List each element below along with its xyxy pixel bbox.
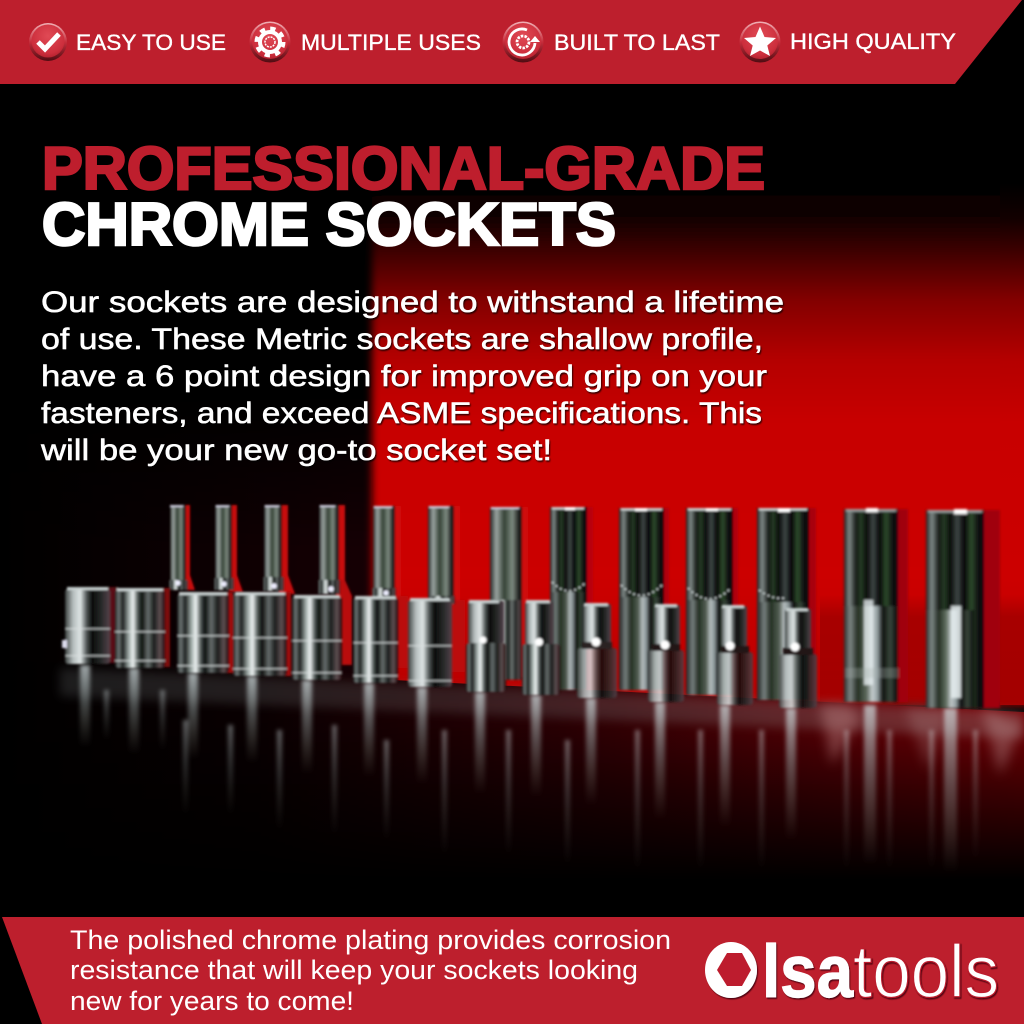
logo: Olsatools: tools <box>853 930 999 1013</box>
logo: Olsatools: lsa <box>762 930 854 1013</box>
socket e short <box>292 595 342 680</box>
socket 12 tall <box>844 508 908 702</box>
socket 3 tall <box>263 505 295 594</box>
icon: check mark badge <box>29 23 67 61</box>
footer text: new for years to come! <box>70 986 354 1016</box>
label: multiple uses: MULTIPLE USES <box>301 30 481 55</box>
socket f short <box>353 596 398 683</box>
socket d short <box>233 592 291 676</box>
body paragraph: of use. These Metric sockets are shallow profile, <box>41 323 763 356</box>
body paragraph: fasteners, and exceed ASME specifications. This <box>41 397 762 430</box>
top banner <box>0 0 1022 84</box>
socket h short <box>466 600 506 692</box>
socket g short <box>408 598 452 687</box>
body paragraph: have a 6 point design for improved grip on your <box>41 360 767 393</box>
socket m short <box>779 608 817 708</box>
reflective surface with socket reflections <box>58 663 1024 870</box>
socket 2 tall <box>214 505 243 592</box>
socket l short <box>717 605 753 705</box>
socket a short <box>62 587 118 664</box>
socket i short <box>522 600 560 695</box>
footer text: resistance that will keep your sockets looking <box>70 955 638 985</box>
footer text <box>70 925 671 1016</box>
footer text: The polished chrome plating provides corrosion <box>70 925 671 955</box>
icon: star badge <box>740 22 780 62</box>
label: built to last: BUILT TO LAST <box>554 30 720 55</box>
socket j short <box>577 603 617 698</box>
socket 10 tall <box>686 508 738 695</box>
title <box>42 135 765 258</box>
title: CHROME SOCKETS <box>42 191 616 258</box>
body paragraph <box>40 286 784 467</box>
sockets: back row of tall deep sockets <box>169 505 816 700</box>
socket 4 tall <box>318 505 352 665</box>
body paragraph: will be your new go-to socket set! <box>40 434 552 467</box>
logo: Olsatools <box>704 929 999 1014</box>
socket 7 tall <box>490 507 528 680</box>
icon: rotating gear badge <box>502 22 544 62</box>
socket 6 tall <box>428 506 465 672</box>
photo background: black and red backdrop <box>138 196 1024 712</box>
sockets: front row of shallow sockets <box>62 587 817 708</box>
title: PROFESSIONAL-GRADE <box>42 135 765 202</box>
bottom banner <box>2 917 1024 1024</box>
socket b short <box>115 588 170 668</box>
socket 8 tall <box>550 507 593 690</box>
body paragraph: Our sockets are designed to withstand a lifetime <box>41 286 784 319</box>
label: easy to use: EASY TO USE <box>76 30 226 55</box>
socket 9 tall <box>619 508 669 690</box>
socket k short <box>648 604 684 702</box>
socket 13 tall <box>926 509 1000 708</box>
socket 1 tall <box>169 505 195 590</box>
icon: gear badge <box>250 22 290 62</box>
socket 5 tall <box>372 506 408 668</box>
label: high quality: HIGH QUALITY <box>790 29 956 54</box>
logo: Olsatools: O <box>704 929 758 1014</box>
socket 11 tall <box>757 508 816 700</box>
socket c short <box>177 592 233 673</box>
sockets: two largest tall sockets at right <box>844 508 1000 708</box>
